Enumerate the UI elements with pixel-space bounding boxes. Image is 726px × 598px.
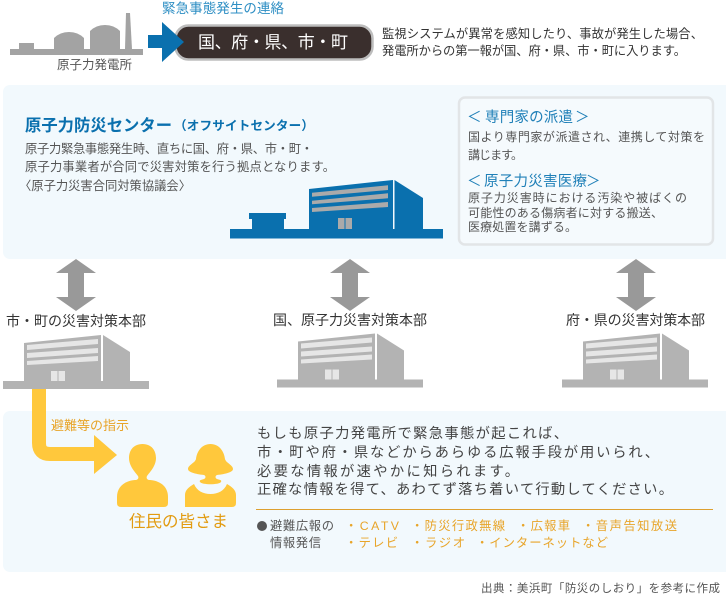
icon: blue building xyxy=(230,180,443,238)
public info items: ・広報車 xyxy=(517,519,570,533)
prefecture HQ label: 府・県の災害対策本部 xyxy=(566,312,705,328)
public info items: ・インターネットなど xyxy=(476,536,608,550)
arrow: blue to pill xyxy=(148,22,184,62)
plant label: 原子力発電所 xyxy=(57,58,132,72)
government contact pill xyxy=(176,26,372,60)
arrow: center to prefecture xyxy=(616,259,656,311)
residents label: 住民の皆さま xyxy=(129,512,228,531)
center description xyxy=(19,141,335,193)
experts text: 講じます。 xyxy=(468,148,523,162)
center description: 〈原子力災害合同対策協議会〉 xyxy=(19,178,191,193)
experts heading: ＞ xyxy=(575,110,590,126)
public info label: 情報発信 xyxy=(270,535,321,550)
residents message: 市・町や府・県などからあらゆる広報手段が用いられ、 xyxy=(257,444,659,461)
arrow: center to state xyxy=(330,259,370,311)
medical text: 可能性のある傷病者に対する搬送、 xyxy=(468,205,663,220)
medical heading: 原子力災害医療 xyxy=(484,173,588,190)
residents message: もしも原子力発電所で緊急事態が起これば、 xyxy=(257,425,568,442)
residents message: 正確な情報を得て、あわてず落ち着いて行動してください。 xyxy=(257,481,673,498)
residents message xyxy=(257,425,673,498)
public info items: ・音声告知放送 xyxy=(582,518,677,533)
source credit: 出典：美浜町「防災のしおり」を参考に作成 xyxy=(481,581,720,595)
medical heading: ＜ xyxy=(467,174,482,190)
public info items: ・テレビ xyxy=(345,536,398,550)
residents message: 必要な情報が速やかに知られます。 xyxy=(257,463,519,480)
experts heading: 専門家の派遣 xyxy=(485,109,573,126)
emergency contact heading: 緊急事態発生の連絡 xyxy=(162,1,284,16)
monitoring text xyxy=(382,26,703,58)
medical text: 医療処置を講ずる。 xyxy=(468,220,577,234)
public info items: ・防災行政無線 xyxy=(411,518,505,533)
experts heading: ＜ xyxy=(467,110,482,126)
arrow: center to city xyxy=(56,259,96,311)
public info items: ・CATV xyxy=(345,519,400,533)
icon: male resident xyxy=(117,444,168,507)
city HQ label: 市・町の災害対策本部 xyxy=(6,313,146,329)
monitoring text: 監視システムが異常を感知したり、事故が発生した場合、 xyxy=(382,26,703,41)
government contact pill: 国、府・県、市・町 xyxy=(198,33,348,52)
public info items: ・ラジオ xyxy=(411,536,465,550)
center description: 原子力事業者が合同で災害対策を行う拠点となります。 xyxy=(25,159,335,174)
public info label xyxy=(257,518,334,550)
state HQ label: 国、原子力災害対策本部 xyxy=(273,312,427,328)
icon: nuclear power plant xyxy=(10,13,143,55)
experts text xyxy=(468,129,705,162)
public info label: 避難広報の xyxy=(270,518,334,533)
medical text xyxy=(468,190,687,234)
icon: prefecture building xyxy=(562,334,708,388)
monitoring text: 発電所からの第一報が国、府・県、市・町に入ります。 xyxy=(382,43,686,58)
center description: 原子力緊急事態発生時、直ちに国、府・県、市・町・ xyxy=(25,141,313,156)
center title: 原子力防災センター xyxy=(25,117,172,135)
center subtitle: （オフサイトセンター） xyxy=(174,119,314,133)
icon: female resident xyxy=(185,444,236,507)
icon: city building xyxy=(3,335,149,389)
medical text: 原子力災害時における汚染や被ばくの xyxy=(468,190,687,205)
experts heading xyxy=(467,109,590,126)
panel: offsite center xyxy=(3,85,726,259)
public info items xyxy=(345,518,677,550)
panel: experts and medical xyxy=(459,98,713,244)
arrow: evacuation instruction xyxy=(39,389,117,474)
medical heading: ＞ xyxy=(586,174,600,190)
evacuation label: 避難等の指示 xyxy=(51,418,129,433)
icon: state building xyxy=(277,334,423,388)
panel: residents xyxy=(3,411,726,572)
experts text: 国より専門家が派遣され、連携して対策を xyxy=(468,129,705,144)
